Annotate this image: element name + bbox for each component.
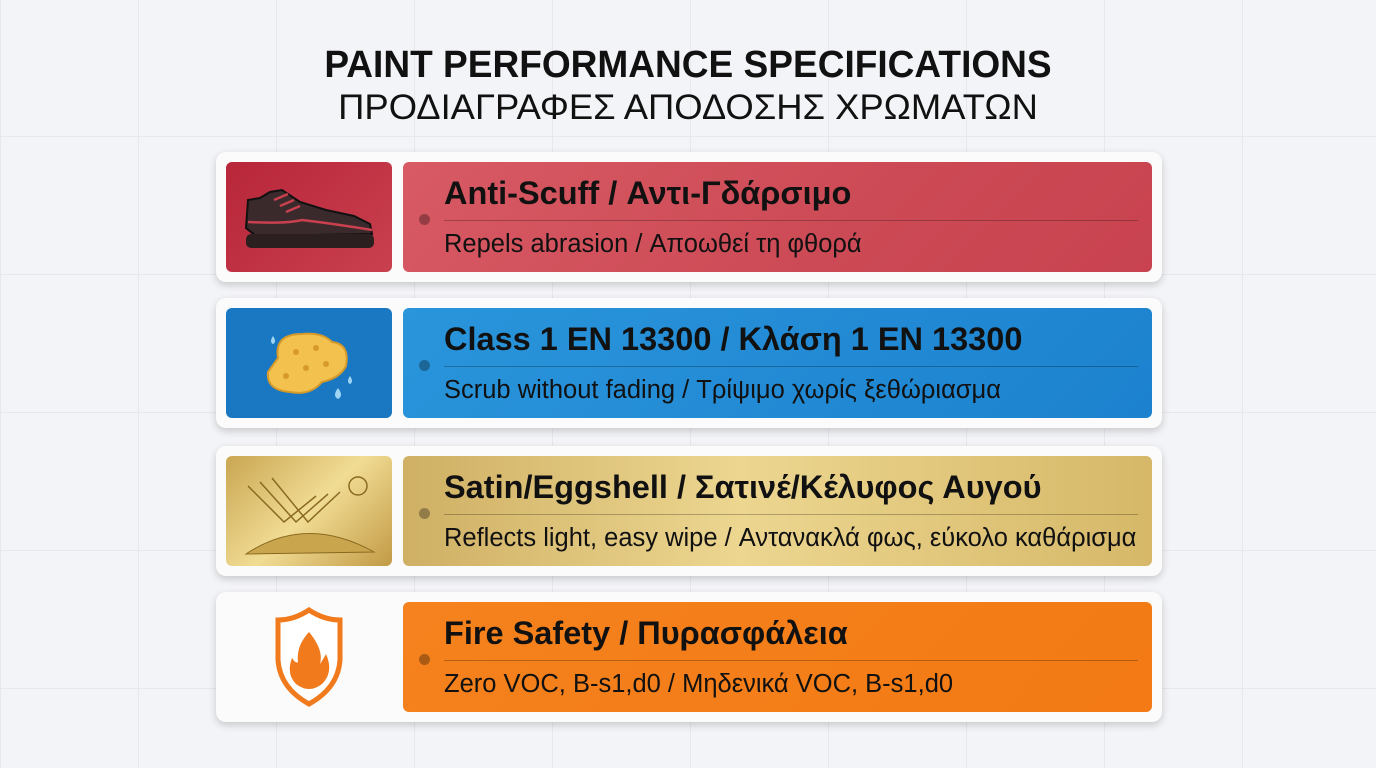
text panel: Zero VOC, B-s1,d0 / Μηδενικά VOC, B-s1,d0 xyxy=(444,670,953,698)
icon: sponge xyxy=(226,308,392,418)
text panel xyxy=(403,308,1152,418)
text panel: Satin/Eggshell / Σατινέ/Κέλυφος Αυγού xyxy=(444,469,1042,505)
card: fire xyxy=(216,592,1162,722)
text panel: Fire Safety / Πυρασφάλεια xyxy=(444,615,848,651)
card: class 1 xyxy=(216,298,1162,428)
text panel: Reflects light, easy wipe / Αντανακλά φως, εύκολο καθάρισμα xyxy=(444,524,1136,552)
icon: light reflection xyxy=(226,456,392,566)
text panel xyxy=(403,602,1152,712)
icon: fire shield xyxy=(276,607,342,707)
text panel: Scrub without fading / Τρίψιμο χωρίς ξεθώριασμα xyxy=(444,376,1001,404)
title: PAINT PERFORMANCE SPECIFICATIONS xyxy=(324,44,1052,86)
text panel: Class 1 EN 13300 / Κλάση 1 EN 13300 xyxy=(444,321,1022,357)
text panel: Repels abrasion / Αποωθεί τη φθορά xyxy=(444,230,862,258)
text panel xyxy=(403,162,1152,272)
text panel: Anti-Scuff / Αντι-Γδάρσιμο xyxy=(444,175,851,211)
subtitle: ΠΡΟΔΙΑΓΡΑΦΕΣ ΑΠΟΔΟΣΗΣ ΧΡΩΜΑΤΩΝ xyxy=(338,88,1038,127)
icon: shoe xyxy=(226,162,392,272)
card: satin xyxy=(216,446,1162,576)
card: anti-scuff xyxy=(216,152,1162,282)
text panel xyxy=(403,456,1152,566)
